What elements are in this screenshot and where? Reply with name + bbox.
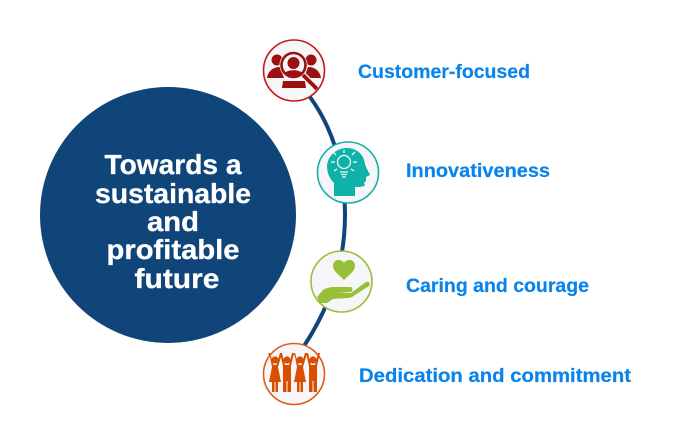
central heading: and xyxy=(147,206,199,237)
icon: caring xyxy=(311,251,372,312)
label: customer-focused: Customer-focused xyxy=(358,62,530,83)
central heading: profitable xyxy=(106,234,240,265)
central heading: sustainable xyxy=(95,178,251,209)
label: innovativeness: Innovativeness xyxy=(406,161,550,182)
icon: innovativeness xyxy=(318,142,378,203)
central heading: Towards a xyxy=(104,149,242,180)
central circle xyxy=(40,87,296,343)
central heading: future xyxy=(134,263,220,294)
icon: dedication xyxy=(264,344,324,404)
central heading xyxy=(95,149,251,294)
label: dedication and commitment: Dedication and commitment xyxy=(359,366,632,387)
icon: customer-focused xyxy=(264,40,324,101)
label: caring and courage: Caring and courage xyxy=(406,276,589,297)
connecting arc xyxy=(304,97,345,346)
